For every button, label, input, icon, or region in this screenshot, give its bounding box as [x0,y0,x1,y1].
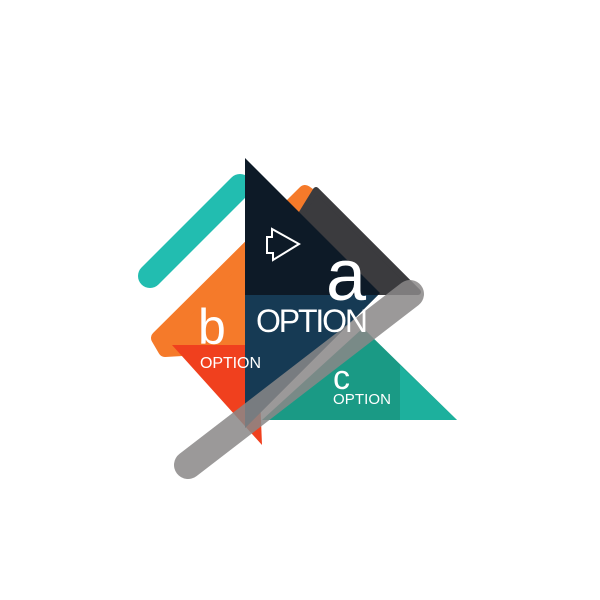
dark gray chevron [300,190,418,292]
teal bar [150,186,240,276]
red triangle panel b [172,345,262,445]
text: b option [198,299,261,372]
text: c option: c [333,359,350,397]
text: c option: OPTION [333,391,391,408]
navy triangle panel a [245,158,380,428]
text: a option [256,236,368,339]
orange band [158,192,322,350]
gray long bar [188,294,410,465]
teal triangle panel c [262,328,457,420]
text: a option: a [326,236,367,316]
icon: arrow [267,229,299,260]
text: c option [333,359,391,408]
text: b option: b [198,299,226,355]
text: b option: OPTION [200,355,261,372]
text: a option: OPTION [256,303,368,339]
